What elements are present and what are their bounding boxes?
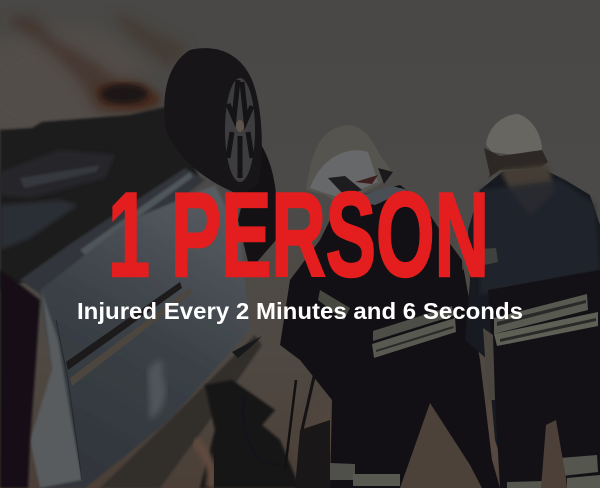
- helmet left: [306, 125, 393, 205]
- wheel rim: [225, 78, 255, 182]
- body right: [465, 170, 600, 488]
- subtitle: Injured Every 2 Minutes and 6 Seconds: [77, 298, 523, 324]
- second tyre: [238, 140, 277, 270]
- left dark pillar: [0, 270, 40, 488]
- overturned car: [0, 48, 277, 488]
- door edge highlight: [30, 292, 82, 488]
- car side rail: [20, 168, 205, 298]
- stripes: [372, 318, 456, 358]
- smoke plume: [6, 14, 190, 115]
- ground gaps between legs: [400, 328, 567, 488]
- firefighter right: [462, 114, 600, 488]
- car underbody: [0, 106, 200, 290]
- firefighter left: [280, 125, 500, 488]
- car side panel: [40, 185, 250, 488]
- helmet right: [484, 114, 548, 178]
- ground wreckage: [195, 350, 330, 488]
- tyre: [164, 48, 262, 195]
- sill: [100, 335, 262, 488]
- body left: [280, 185, 500, 488]
- stripes: [494, 294, 588, 334]
